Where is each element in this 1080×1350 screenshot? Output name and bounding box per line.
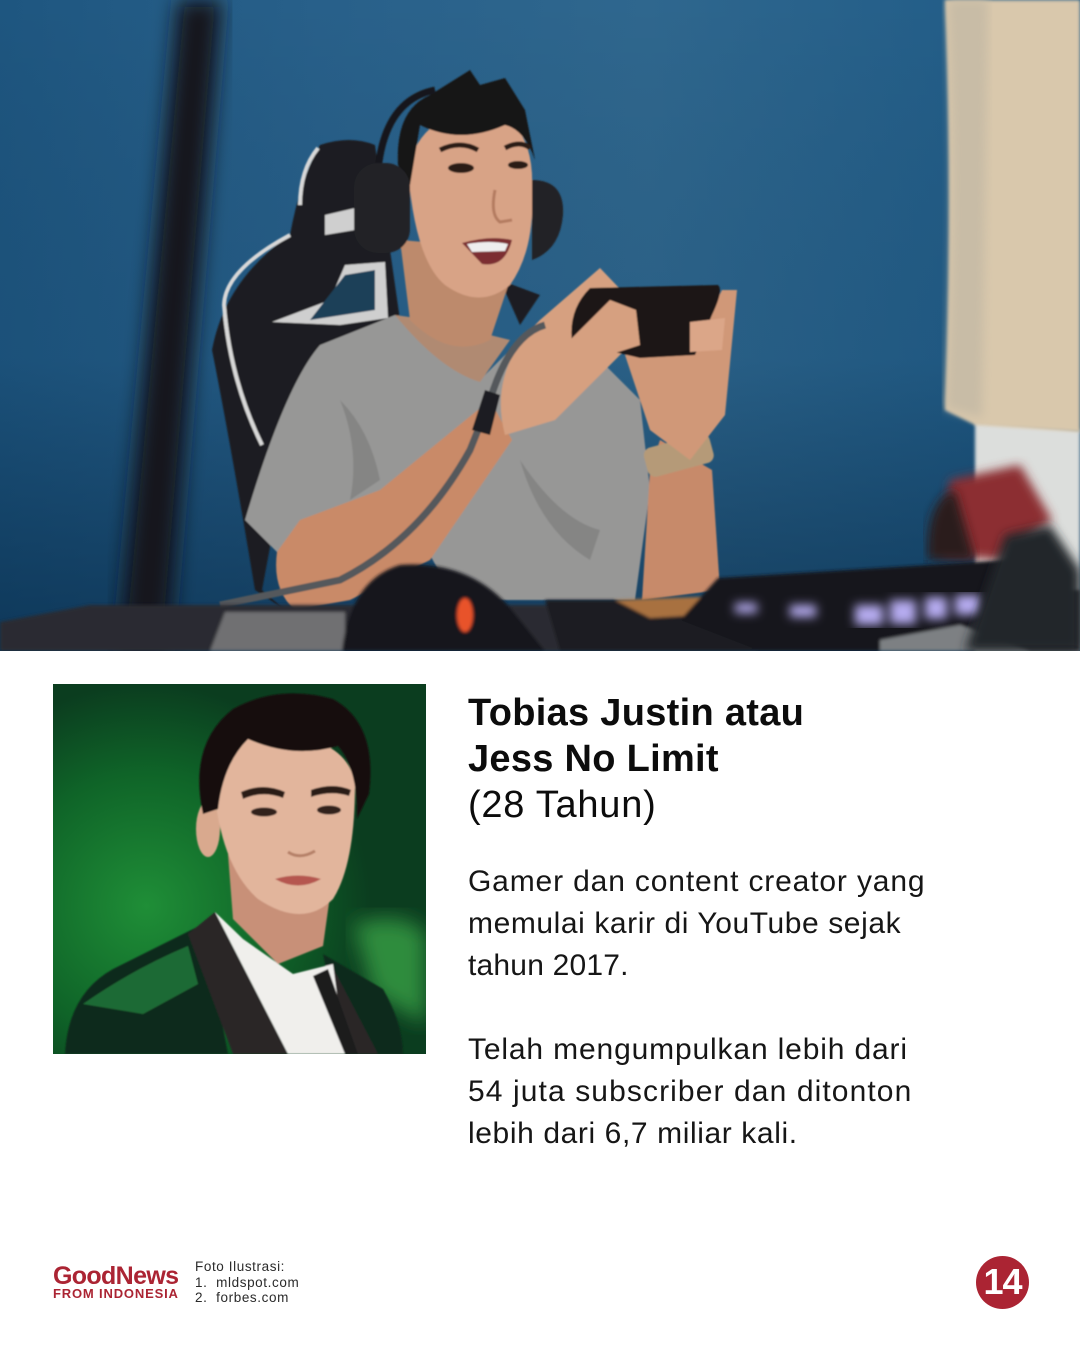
headphones <box>378 90 435 170</box>
mouth and eyes <box>462 238 512 264</box>
ear <box>196 801 220 857</box>
phone <box>571 285 720 358</box>
description paragraph 1 <box>468 865 925 982</box>
t-shirt <box>245 315 650 600</box>
description paragraph 2: lebih dari 6,7 miliar kali. <box>468 1117 798 1150</box>
name heading: Tobias Justin atau <box>468 692 804 734</box>
logo: GoodNews from Indonesia: FROM INDONESIA <box>53 1286 179 1301</box>
photo credits: Foto Ilustrasi: <box>195 1259 285 1274</box>
neck <box>228 854 333 964</box>
arms <box>276 400 512 610</box>
description paragraph 1: tahun 2017. <box>468 949 629 982</box>
chair <box>212 140 400 610</box>
face <box>213 734 355 914</box>
description paragraph 1: memulai karir di YouTube sejak <box>468 907 901 940</box>
profile text block <box>468 692 925 1150</box>
description paragraph 2: Telah mengumpulkan lebih dari <box>468 1033 908 1066</box>
description paragraph 2 <box>468 1033 912 1150</box>
photo credits <box>195 1259 299 1305</box>
hair <box>199 693 370 819</box>
desk: keyboard, mouse <box>0 590 1080 651</box>
hero photo: gamer holding phone <box>0 0 1080 651</box>
hands <box>501 268 640 435</box>
name heading <box>468 692 804 826</box>
face <box>408 110 532 298</box>
neck <box>400 240 520 347</box>
page number badge <box>976 1256 1029 1309</box>
description paragraph 1: Gamer dan content creator yang <box>468 865 925 898</box>
name heading: Jess No Limit <box>468 738 719 780</box>
logo: GoodNews from Indonesia: GoodNews <box>53 1262 178 1290</box>
description paragraph 2: 54 juta subscriber dan ditonton <box>468 1075 912 1108</box>
page number badge: 14 <box>983 1261 1022 1302</box>
photo credits: 1. mldspot.com <box>195 1274 299 1290</box>
shirt <box>215 912 345 1054</box>
cable <box>220 325 545 605</box>
hair <box>398 70 535 185</box>
blazer <box>65 924 403 1054</box>
features <box>241 787 285 799</box>
photo credits: 2. forbes.com <box>195 1290 289 1305</box>
portrait photo: man in green velvet blazer <box>53 684 426 1054</box>
name heading: (28 Tahun) <box>468 784 656 826</box>
